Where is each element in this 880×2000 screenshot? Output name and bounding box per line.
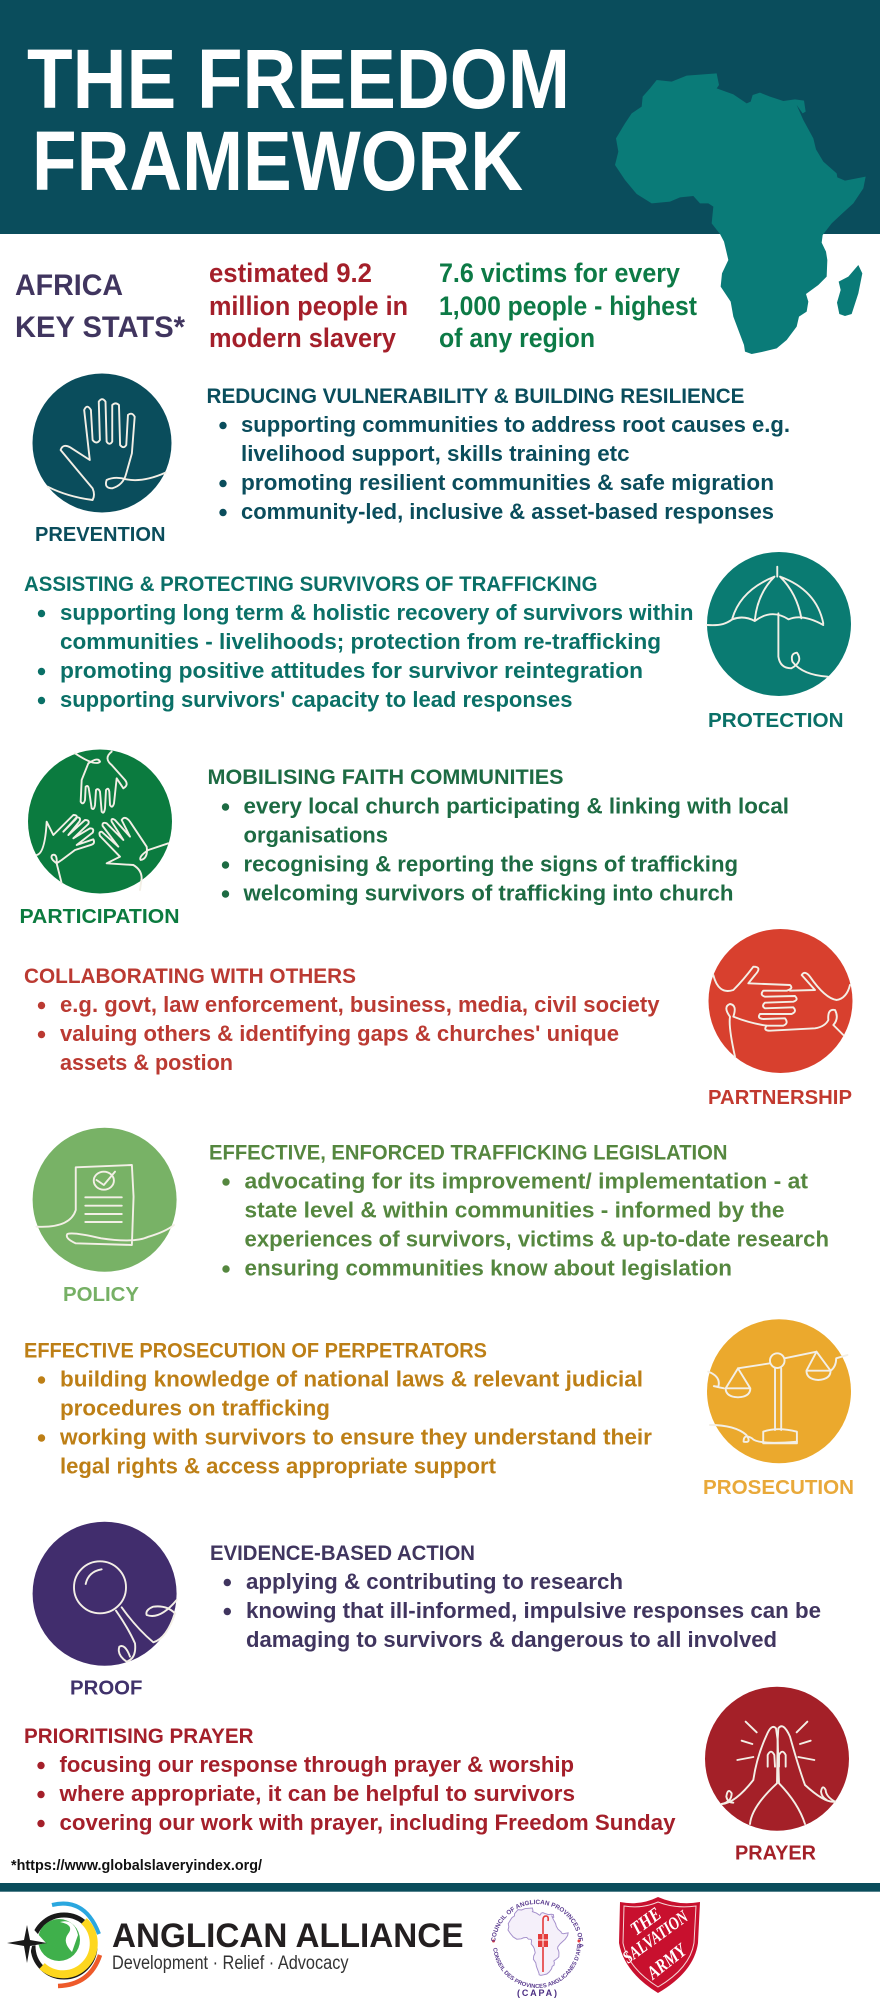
- icon: hand: [32, 374, 172, 512]
- bullet list: applying & contributing to research: [246, 1569, 623, 1594]
- icon label: PROTECTION: [708, 710, 844, 732]
- footnote source: *https://www.globalslaveryindex.org/: [11, 1857, 263, 1874]
- panel: policy: [33, 1128, 829, 1306]
- bullet list: organisations: [244, 822, 388, 848]
- icon: praying hands: [705, 1687, 849, 1831]
- bullet list: damaging to survivors & dangerous to all involved: [246, 1627, 777, 1652]
- heading: MOBILISING FAITH COMMUNITIES: [208, 765, 564, 789]
- logo: The Salvation Army shield: SALVATION: [619, 1906, 692, 1967]
- logo: The Salvation Army shield: THE: [627, 1904, 666, 1940]
- stat: people in modern slavery: modern slavery: [209, 323, 396, 353]
- stat: people in modern slavery: [209, 258, 408, 353]
- stat: victims per 1,000 people: 7.6 victims for every: [439, 258, 680, 288]
- icon label: PARTNERSHIP: [708, 1087, 852, 1109]
- icon label: POLICY: [63, 1284, 140, 1306]
- icon: document: [33, 1128, 177, 1272]
- title: FRAMEWORK: [32, 114, 523, 208]
- bullet list: e.g. govt, law enforcement, business, media, civil society: [60, 992, 660, 1017]
- bullet list: [38, 600, 694, 712]
- title: THE FREEDOM: [27, 32, 570, 126]
- header band: [0, 0, 880, 234]
- bullet list: valuing others & identifying gaps & churches' unique: [60, 1021, 619, 1046]
- ring text: COUNCIL OF ANGLICAN PROVINCES OF AFRICA: [491, 1900, 584, 1948]
- bullet list: [38, 992, 660, 1075]
- bullet list: advocating for its improvement/ implementation - at: [244, 1168, 809, 1194]
- panel: prayer: [24, 1687, 849, 1864]
- logo: Anglican Alliance: [7, 1904, 464, 1986]
- bullet list: building knowledge of national laws & relevant judicial: [60, 1366, 643, 1392]
- bullet list: community-led, inclusive & asset-based responses: [241, 499, 774, 524]
- heading: EVIDENCE-BASED ACTION: [210, 1541, 475, 1565]
- bullet list: [219, 412, 790, 524]
- stat: victims per 1,000 people: of any region: [439, 323, 595, 353]
- bullet list: covering our work with prayer, including Freedom Sunday: [60, 1810, 676, 1835]
- ring text: [491, 1900, 584, 1988]
- panel: prevention: [32, 374, 790, 546]
- bullet list: [224, 1569, 821, 1652]
- stat: victims per 1,000 people: 1,000 people - highest: [439, 291, 697, 321]
- icon: joined hands: [708, 929, 852, 1073]
- key stats heading: [15, 269, 185, 344]
- logo: The Salvation Army shield: [619, 1897, 700, 1993]
- key stats heading: AFRICA: [15, 269, 123, 302]
- stat: victims per 1,000 people: [439, 258, 697, 353]
- bullet list: state level & within communities - informed by the: [244, 1198, 784, 1222]
- ring text: CONSEIL DES PROVINCES ANGLICANES D'AFRIQUE: [493, 1944, 581, 1988]
- bullet list: legal rights & access appropriate support: [60, 1454, 497, 1478]
- bullet list: [37, 1752, 676, 1835]
- bullet list: knowing that ill-informed, impulsive responses can be: [246, 1598, 821, 1623]
- bullet list: [38, 1366, 652, 1478]
- bullet list: where appropriate, it can be helpful to survivors: [58, 1781, 575, 1806]
- stat: people in modern slavery: million people in: [209, 291, 408, 321]
- panel: partnership: [24, 929, 852, 1109]
- footer band: [0, 1883, 880, 1892]
- acronym: (CAPA): [517, 1988, 557, 1998]
- icon: magnifying glass: [33, 1522, 177, 1666]
- panel: prosecution: [24, 1319, 854, 1499]
- bullet list: experiences of survivors, victims & up-to-date research: [244, 1226, 829, 1252]
- bullet list: supporting communities to address root causes e.g.: [241, 412, 790, 437]
- heading: EFFECTIVE, ENFORCED TRAFFICKING LEGISLATION: [209, 1140, 728, 1164]
- bullet list: procedures on trafficking: [60, 1396, 330, 1420]
- heading: REDUCING VULNERABILITY & BUILDING RESILIENCE: [206, 384, 744, 408]
- bullet list: working with survivors to ensure they understand their: [59, 1424, 652, 1450]
- bullet list: supporting long term & holistic recovery of survivors within: [60, 600, 694, 625]
- logo: CAPA: [491, 1900, 584, 1998]
- panel: protection: [24, 552, 851, 732]
- icon: scales: [707, 1319, 851, 1463]
- key stats heading: KEY STATS*: [15, 311, 185, 344]
- icon label: PROSECUTION: [703, 1477, 854, 1499]
- bullet list: every local church participating & linking with local: [244, 794, 789, 818]
- bullet list: recognising & reporting the signs of trafficking: [244, 852, 738, 876]
- map outline: [508, 1908, 568, 1975]
- tagline: Development · Relief · Advocacy: [112, 1953, 349, 1974]
- bullet list: [222, 794, 789, 906]
- icon label: PRAYER: [735, 1842, 817, 1864]
- bullet list: ensuring communities know about legislation: [244, 1256, 732, 1280]
- panel: proof: [33, 1522, 821, 1700]
- panel: participation: [20, 750, 789, 928]
- bullet list: focusing our response through prayer & worship: [60, 1752, 574, 1777]
- icon: three hands: [28, 750, 172, 894]
- heading: ASSISTING & PROTECTING SURVIVORS OF TRAFFICKING: [24, 572, 598, 596]
- bullet list: communities - livelihoods; protection from re-trafficking: [60, 629, 661, 654]
- stat: people in modern slavery: estimated 9.2: [209, 258, 372, 288]
- bullet list: [222, 1168, 829, 1280]
- bullet list: promoting positive attitudes for survivor reintegration: [60, 658, 643, 683]
- bullet list: supporting survivors' capacity to lead responses: [60, 687, 572, 712]
- bullet list: livelihood support, skills training etc: [241, 441, 630, 466]
- logo: The Salvation Army shield: ARMY: [643, 1939, 692, 1984]
- title: [27, 32, 570, 208]
- icon label: PREVENTION: [35, 524, 166, 546]
- heading: PRIORITISING PRAYER: [24, 1724, 254, 1748]
- crozier and shield: [492, 1916, 580, 1972]
- heading: COLLABORATING WITH OTHERS: [24, 964, 356, 988]
- icon label: PROOF: [70, 1678, 142, 1700]
- icon label: PARTICIPATION: [20, 906, 180, 928]
- wordmark: ANGLICAN ALLIANCE: [112, 1917, 464, 1955]
- heading: EFFECTIVE PROSECUTION OF PERPETRATORS: [24, 1338, 487, 1362]
- bullet list: promoting resilient communities & safe migration: [241, 470, 774, 495]
- bullet list: assets & postion: [60, 1050, 233, 1075]
- icon: globe and star: [7, 1904, 100, 1986]
- map of Africa: [615, 73, 866, 354]
- icon: umbrella: [707, 552, 851, 696]
- bullet list: welcoming survivors of trafficking into church: [242, 880, 734, 906]
